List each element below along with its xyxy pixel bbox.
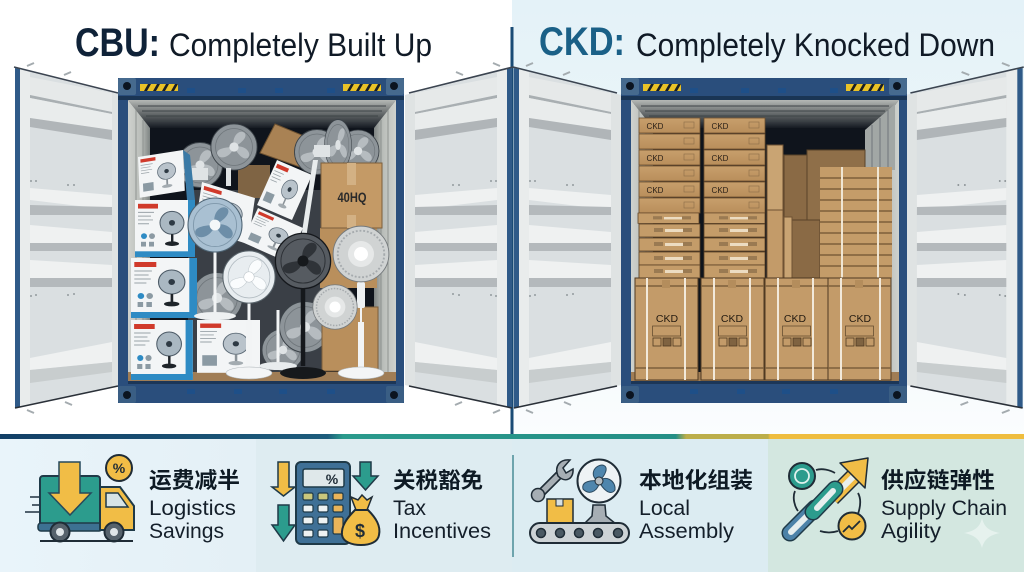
small cartons column 1 <box>638 118 700 278</box>
panel: logistics savings <box>0 439 256 572</box>
icon: conveyor and fan <box>530 460 629 543</box>
right door <box>405 63 513 413</box>
panel: CKD container <box>513 63 1024 413</box>
large carton 3 <box>765 278 828 380</box>
text: local assembly: Local <box>639 496 690 520</box>
strapped stack <box>820 167 892 278</box>
icon: calculator with money bag: $ <box>355 521 365 541</box>
large carton 1: CKD <box>656 313 679 325</box>
panel: local assembly <box>512 439 768 572</box>
text: logistics savings <box>149 468 240 543</box>
icon: calculator with money bag: % <box>326 471 339 487</box>
icon: delivery truck <box>25 455 134 542</box>
large carton 4 <box>828 278 891 380</box>
small cartons column 2: CKD <box>712 122 729 131</box>
text: supply chain agility: Agility <box>881 519 941 543</box>
large carton 2: CKD <box>721 313 744 325</box>
icon: delivery truck: % <box>113 460 126 476</box>
text: supply chain agility: Supply Chain <box>881 496 1007 520</box>
background: CKD half <box>512 0 1024 434</box>
text: supply chain agility: 供应链弹性 <box>881 468 995 493</box>
fan stand poles <box>215 250 278 362</box>
left door <box>513 63 621 413</box>
text: tax incentives: Tax <box>393 496 426 520</box>
title: CKD: Completely Knocked Down <box>636 27 995 63</box>
title: CBU: Completely Built Up <box>169 27 432 63</box>
title: CKD: CKD: <box>539 20 625 64</box>
left door <box>14 63 122 413</box>
container frame <box>118 78 404 403</box>
cargo: loose fans and boxes <box>131 120 389 380</box>
panel: tax incentives <box>256 439 512 572</box>
large carton 2 <box>701 278 764 380</box>
text: logistics savings: Savings <box>149 519 224 543</box>
text: tax incentives: 关税豁免 <box>393 468 483 493</box>
small cartons column 1: CKD <box>647 122 664 131</box>
right door <box>906 63 1024 413</box>
panel: supply chain agility <box>768 439 1024 572</box>
footer colour bar <box>0 434 1024 439</box>
box: 40HQ carton: 40HQ <box>338 189 367 205</box>
panel: CBU container <box>14 63 513 413</box>
title: CBU: CBU: <box>75 21 160 65</box>
large carton 3: CKD <box>784 313 807 325</box>
small cartons column 2: CKD <box>712 186 729 195</box>
text: supply chain agility <box>881 468 1007 543</box>
container frame <box>621 78 907 403</box>
title: CKD <box>539 20 995 64</box>
large carton 1 <box>635 278 698 380</box>
icon: chain with arrow <box>789 458 868 540</box>
large carton 4: CKD <box>849 313 872 325</box>
box: 40HQ carton <box>321 163 382 228</box>
small cartons column 2: CKD <box>712 154 729 163</box>
text: tax incentives <box>393 468 491 543</box>
icon: sparkle <box>964 518 1000 548</box>
centre divider <box>510 27 514 434</box>
icon: calculator with money bag <box>272 462 379 545</box>
text: local assembly: Assembly <box>639 519 734 543</box>
text: logistics savings: 运费减半 <box>149 468 240 493</box>
text: local assembly <box>639 468 753 543</box>
title: CBU <box>75 21 432 65</box>
text: tax incentives: Incentives <box>393 519 491 543</box>
cargo: flat-packed cartons <box>635 104 895 380</box>
small cartons column 1: CKD <box>647 154 664 163</box>
text: logistics savings: Logistics <box>149 496 236 520</box>
text: local assembly: 本地化组装 <box>639 468 753 493</box>
small cartons column 2 <box>704 118 765 278</box>
small cartons column 1: CKD <box>647 186 664 195</box>
